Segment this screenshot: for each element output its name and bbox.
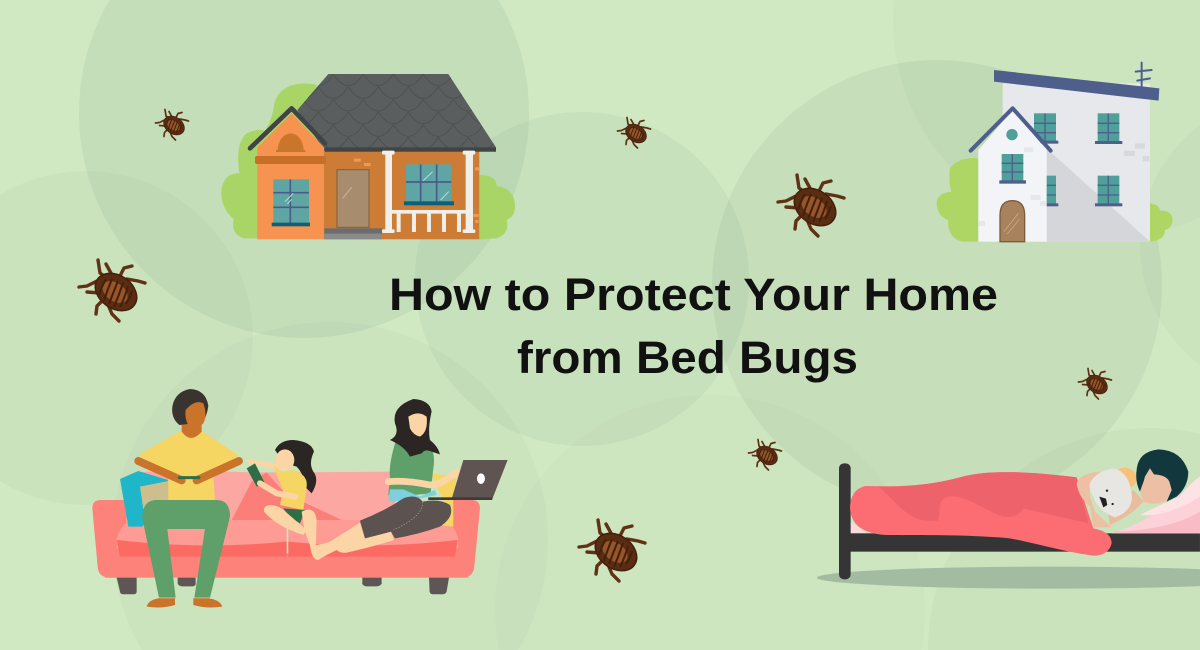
bed frame (839, 463, 1200, 579)
front gable wall (978, 110, 1047, 242)
round window (1006, 129, 1018, 140)
floor shadow (817, 567, 1200, 589)
steps (324, 228, 382, 239)
bushes (221, 84, 515, 239)
gable roof edge (971, 108, 1051, 151)
bushes (937, 158, 1173, 242)
gable roof edge (250, 108, 325, 148)
front window (999, 154, 1026, 184)
wall bricks (1124, 143, 1149, 161)
illustration: orange brick house (221, 74, 515, 239)
mattress end (850, 522, 867, 533)
door (337, 170, 369, 227)
gable vent (276, 133, 305, 152)
bed bug: upper right large (778, 175, 844, 236)
porch columns and railing (382, 151, 475, 233)
illustration: family on sofa (92, 389, 508, 608)
pillow (1112, 477, 1200, 533)
wall shadow (1047, 148, 1150, 242)
woman (317, 438, 458, 558)
gable band (255, 156, 326, 164)
illustration: person sleeping in bed (817, 449, 1200, 589)
title: from Bed Bugs (517, 332, 858, 383)
wall bricks (354, 159, 479, 223)
bed bug: top left small (156, 110, 188, 140)
title (389, 269, 998, 383)
title: How to Protect Your Home (389, 269, 998, 320)
woman hair and face (390, 399, 440, 457)
antenna (1136, 63, 1152, 87)
arched door (1000, 201, 1025, 242)
bed bug: top centre small (618, 118, 650, 148)
child (247, 440, 337, 560)
bed bug: left large (79, 260, 145, 321)
left window (272, 179, 310, 226)
arm and dog (1077, 468, 1132, 527)
blanket (850, 472, 1112, 556)
laptop (428, 460, 508, 500)
right window (404, 164, 454, 205)
upper and lower windows (1034, 113, 1122, 206)
bed bug: bottom centre large (579, 520, 645, 581)
child and woman body (247, 438, 458, 560)
bed bug: centre small (748, 440, 782, 470)
roof (297, 74, 496, 152)
flat roof (994, 70, 1159, 101)
bed bug: right small (1078, 368, 1112, 399)
gable wall (257, 113, 324, 239)
main wall (1003, 83, 1150, 242)
main wall (323, 150, 479, 239)
illustration: white two-storey house (937, 63, 1173, 242)
sleeper and pillow (1107, 449, 1200, 533)
front wall bricks (978, 147, 1047, 226)
sofa (92, 471, 480, 594)
man (120, 389, 239, 608)
